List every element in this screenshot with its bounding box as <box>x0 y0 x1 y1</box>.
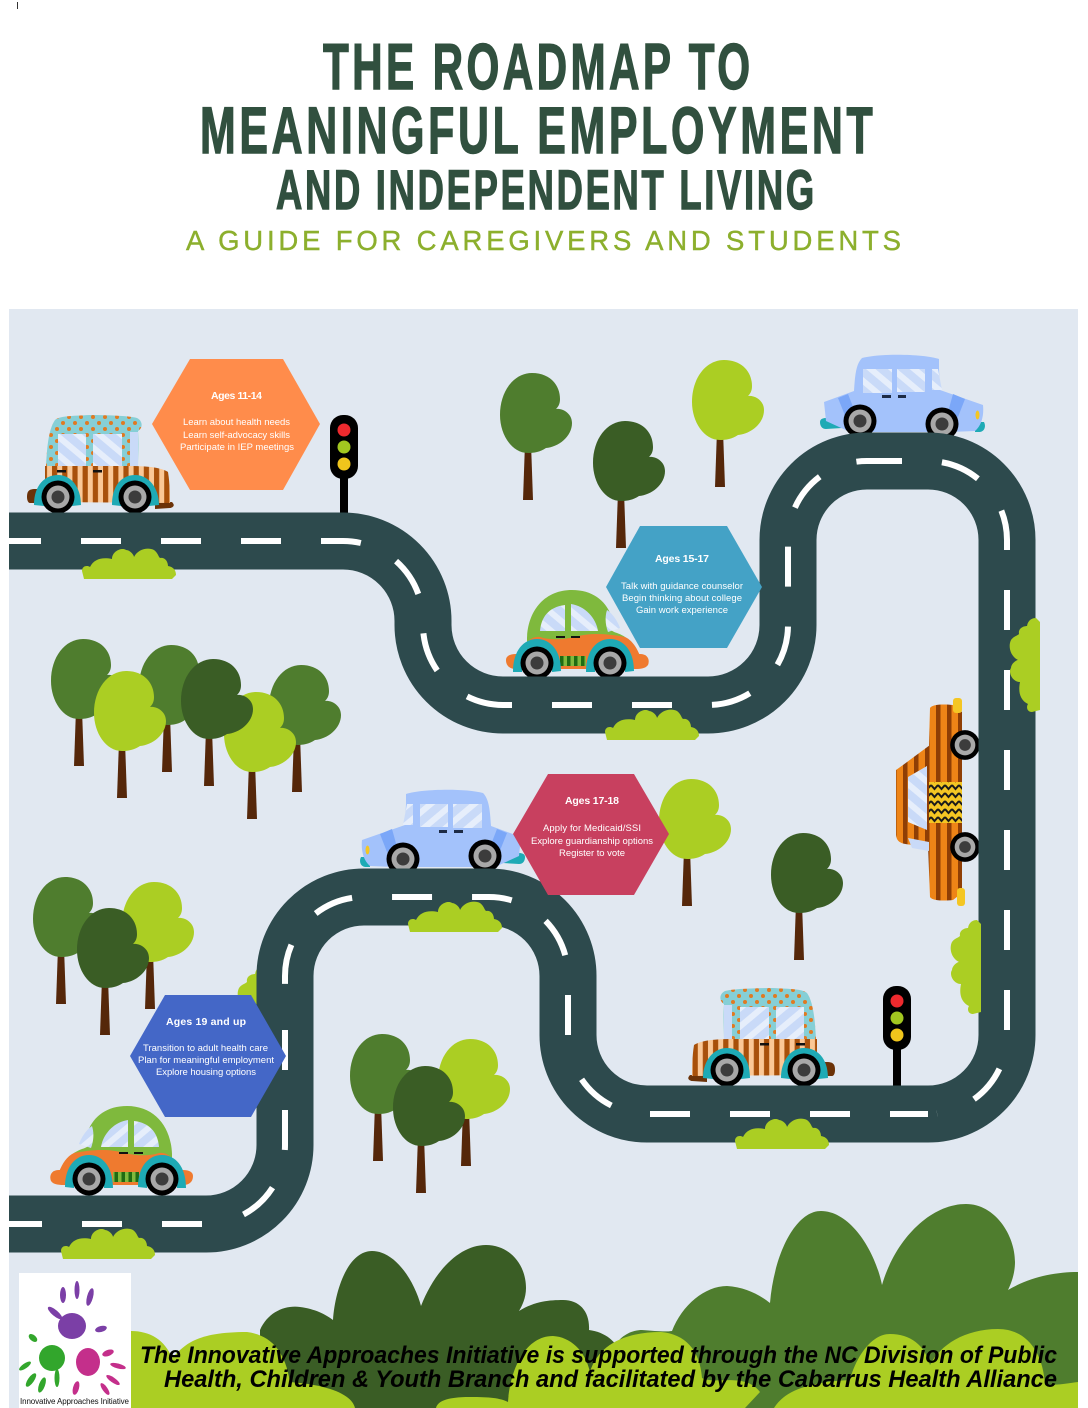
car: orange car vertical <box>896 698 980 906</box>
bush: top road <box>82 549 176 579</box>
car: green beetle centre <box>506 590 649 680</box>
footer note <box>140 1342 1057 1393</box>
car: blue sedan centre <box>360 790 525 876</box>
panel: ages 17-18: Ages 17-18 <box>565 795 619 807</box>
panel: ages 19 and up: Ages 19 and up <box>166 1016 246 1028</box>
logo: Innovative Approaches Initiative: Innovative Approaches Initiative <box>20 1397 130 1406</box>
bush: bottom left road <box>61 1229 155 1259</box>
title <box>200 30 873 222</box>
bush: right road lower <box>951 920 981 1014</box>
subtitle: A GUIDE FOR CAREGIVERS AND STUDENTS <box>186 225 901 256</box>
car: green beetle lower left <box>50 1106 193 1196</box>
panel: ages 11-14: Learn about health needs <box>183 417 290 428</box>
car: blue sedan top right <box>820 355 985 440</box>
foliage: foreground bushes <box>131 1204 1078 1408</box>
tree cluster: top centre <box>500 360 764 548</box>
tree cluster: right middle <box>659 779 843 960</box>
panel: ages 19 and up: Transition to adult health care <box>143 1043 268 1054</box>
icon: purple hand <box>46 1281 108 1339</box>
title: MEANINGFUL EMPLOYMENT <box>200 94 873 167</box>
panel: ages 15-17: Begin thinking about college <box>622 593 742 604</box>
icon: green hand <box>18 1332 65 1394</box>
panel: ages 15-17: Talk with guidance counselor <box>621 581 743 592</box>
panel: ages 11-14: Participate in IEP meetings <box>180 442 294 453</box>
bush: right road upper <box>1010 618 1040 712</box>
panel: ages 11-14 <box>152 359 320 490</box>
corner mark <box>17 2 18 9</box>
title: THE ROADMAP TO <box>323 30 750 103</box>
panel: ages 19 and up: Plan for meaningful employment <box>138 1055 274 1066</box>
tree cluster: lower left <box>33 877 194 1035</box>
panel: ages 17-18: Apply for Medicaid/SSI <box>543 823 641 834</box>
panel: ages 19 and up: Explore housing options <box>156 1067 256 1078</box>
panel: ages 11-14: Ages 11-14 <box>211 390 262 402</box>
bush: lower road <box>735 1119 829 1149</box>
tree cluster: lower centre <box>350 1034 510 1193</box>
traffic light: top <box>330 415 358 515</box>
footer note: Health, Children & Youth Branch and facilitated by the Cabarrus Health Alliance <box>164 1366 1057 1393</box>
panel: ages 15-17: Ages 15-17 <box>655 553 709 565</box>
road centre dashes <box>9 461 1007 1224</box>
icon: pink hand <box>71 1348 126 1396</box>
panel: ages 17-18: Explore guardianship options <box>531 836 653 847</box>
footer note: The Innovative Approaches Initiative is supported through the NC Division of Public <box>140 1342 1057 1369</box>
bush: middle road <box>605 710 699 740</box>
panel: ages 15-17: Gain work experience <box>636 605 728 616</box>
panel: ages 11-14: Learn self-advocacy skills <box>183 430 290 441</box>
title: AND INDEPENDENT LIVING <box>276 159 814 222</box>
panel: ages 19 and up <box>130 995 286 1117</box>
logo: Innovative Approaches Initiative <box>18 1273 131 1408</box>
panel: ages 17-18: Register to vote <box>559 848 625 859</box>
tree cluster: left middle <box>51 639 341 819</box>
car: striped bus lower right <box>688 988 835 1086</box>
panel: ages 15-17 <box>606 526 762 648</box>
panel: map background <box>9 309 1078 1408</box>
road <box>9 461 1007 1224</box>
panel: ages 17-18 <box>513 774 669 895</box>
bush: centre road <box>408 902 502 932</box>
traffic light: bottom <box>883 986 911 1086</box>
bush: behind road on left vertical <box>238 966 268 1060</box>
car: striped bus top left <box>27 415 174 514</box>
